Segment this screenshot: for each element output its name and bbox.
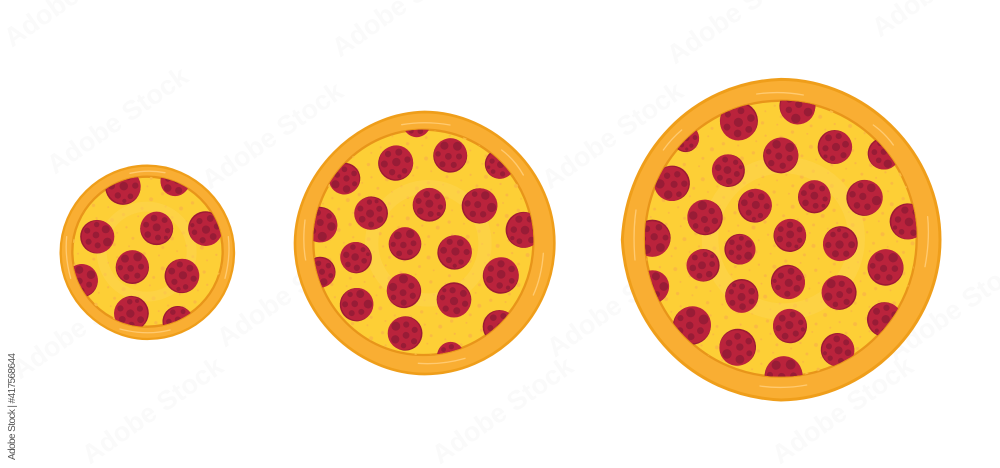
small pizza crust (61, 166, 234, 339)
large pizza pepperoni (629, 83, 931, 396)
watermark pattern: Adobe Stock (76, 350, 229, 468)
large pizza (622, 79, 940, 400)
medium pizza pepperoni (313, 130, 534, 354)
medium pizza crust highlights (304, 123, 543, 364)
large pizza crust (622, 79, 940, 400)
watermark pattern: Adobe Stock (6, 265, 159, 385)
stock id side label: Adobe Stock | #417568644 (7, 353, 18, 460)
watermark pattern: Adobe Stock (536, 75, 689, 195)
small pizza cheese (72, 177, 223, 327)
small pizza (59, 162, 234, 343)
large pizza cheese (645, 101, 917, 377)
medium pizza crust (295, 112, 554, 374)
watermark pattern: Adobe Stock (196, 75, 349, 195)
small pizza pepperoni (74, 177, 221, 326)
watermark pattern: Adobe Stock (426, 350, 579, 468)
large pizza crust highlights (634, 93, 928, 387)
medium pizza cheese (313, 130, 533, 355)
watermark pattern: Adobe Stock (41, 60, 194, 180)
medium pizza (295, 107, 554, 374)
watermark pattern: Adobe Stock (766, 350, 919, 468)
small pizza crust highlights (66, 171, 229, 333)
watermark pattern: Adobe Stock (211, 233, 364, 353)
watermark pattern: Adobe Stock (541, 243, 694, 363)
